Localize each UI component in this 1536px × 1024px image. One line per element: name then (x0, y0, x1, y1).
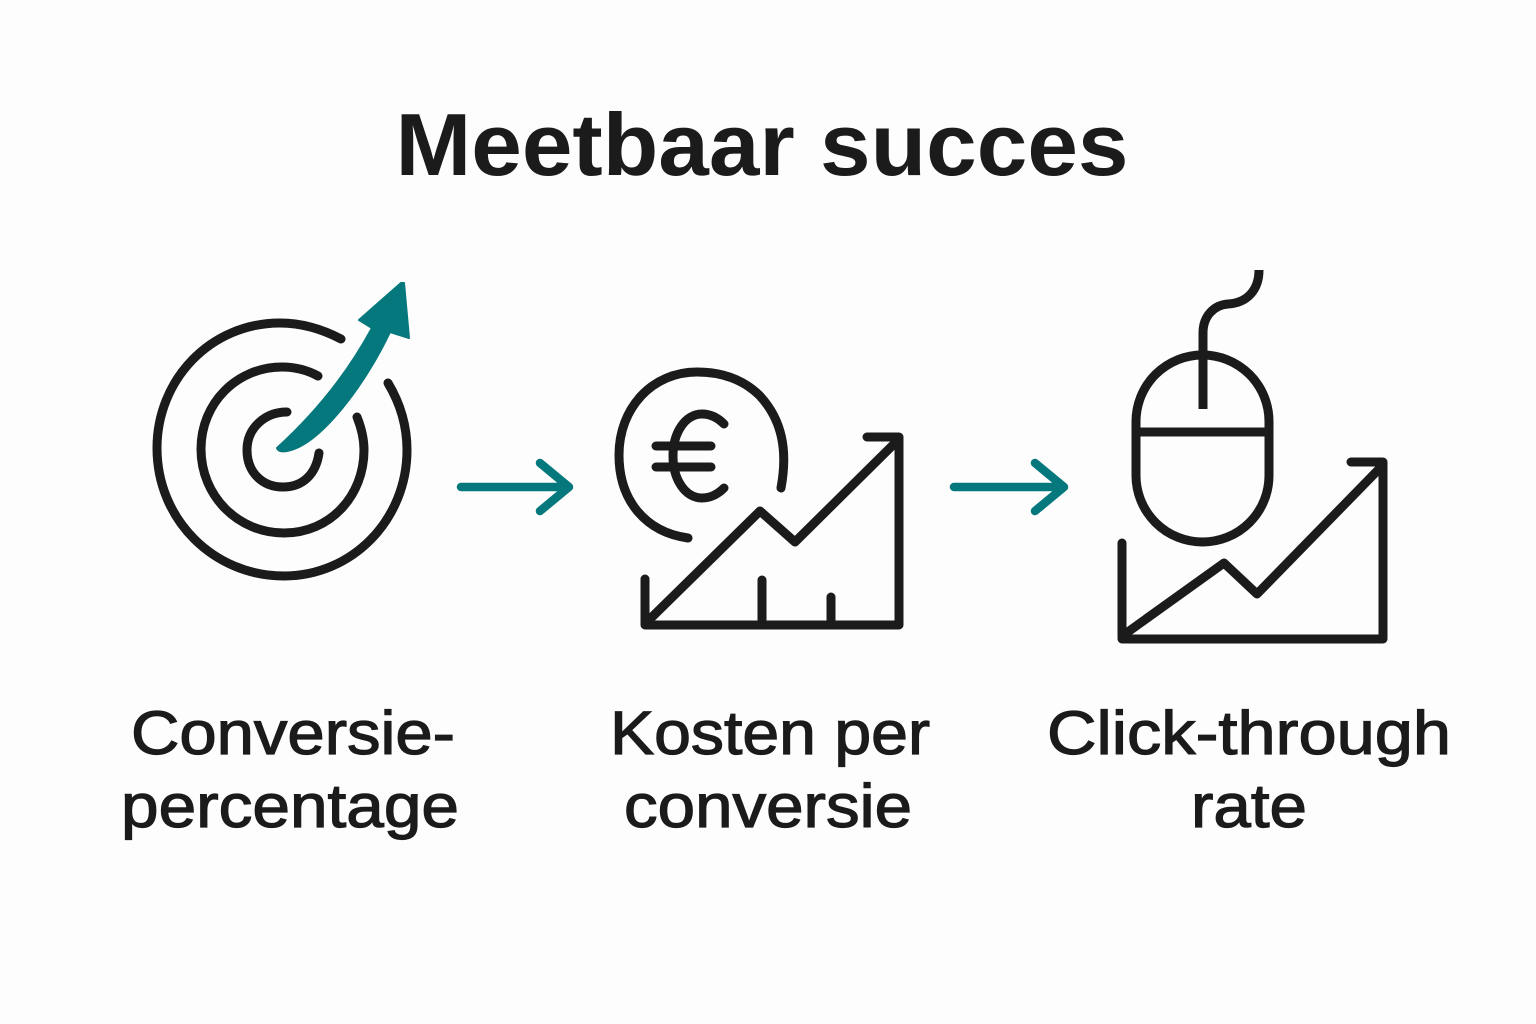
label: Click-through rate: rate (1191, 772, 1307, 840)
label: Conversie-percentage (121, 699, 459, 840)
label: Click-through rate: Click-through (1047, 699, 1451, 767)
title: Meetbaar succes (396, 95, 1128, 194)
label: Conversie-percentage: percentage (121, 772, 459, 840)
label: Click-through rate (1047, 699, 1451, 840)
label: Kosten per conversie (610, 699, 930, 840)
icon: target with arrow (157, 283, 409, 576)
label: Kosten per conversie: Kosten per (610, 699, 930, 767)
label: Conversie-percentage: Conversie- (131, 699, 455, 767)
arrow 1 (461, 463, 569, 511)
icon: euro with chart (619, 372, 899, 625)
label: Kosten per conversie: conversie (624, 772, 912, 840)
icon: mouse with chart (1122, 270, 1383, 639)
arrow 2 (954, 463, 1064, 511)
